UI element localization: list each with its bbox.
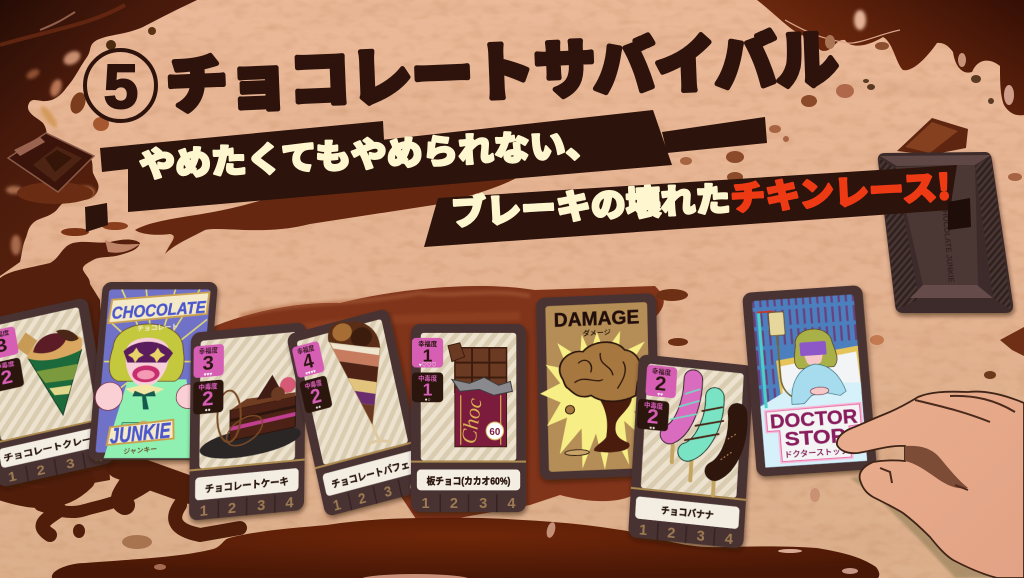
card: doctor stop [742, 285, 877, 477]
bar stats: ●○ [425, 398, 431, 403]
chocolate chunk: left [8, 133, 94, 192]
hand: shadow on table [850, 470, 1010, 578]
card: chocolate cake: 1 [200, 503, 208, 520]
chocolate bar illustration: 60 [489, 427, 501, 438]
JUNKIE logo: JUNKIE [110, 418, 172, 448]
card: chocolate parfait: 4 [408, 475, 418, 494]
bar stats: 1 [423, 345, 433, 366]
crepe illustration [14, 321, 94, 423]
chocolate splash: lower left [0, 465, 240, 535]
subtitle line 2: ブレーキの壊れたチキンレース! [450, 160, 952, 235]
cake stats: 幸福度 [199, 345, 218, 356]
parfait stats: ●● [315, 404, 322, 410]
doctor stop illustration [753, 305, 867, 468]
cake stats: 2 [202, 387, 214, 411]
card: chocolate junkie [88, 282, 218, 460]
banana stats [636, 364, 677, 433]
damage kana: ダメージ [583, 327, 611, 337]
cake stats: ●● [205, 408, 211, 414]
parfait stats [292, 341, 333, 414]
parfait stats: 4 [301, 350, 316, 375]
CHOCOLATE logo: チョコレート [137, 323, 178, 333]
DOCTOR STOP logo: STOP [784, 425, 847, 451]
CHOCOLATE logo [107, 292, 209, 333]
cake stats: ♥♥♥ [204, 372, 213, 378]
brain illustration [559, 341, 643, 456]
card: chocolate crepe: 4 [94, 450, 104, 466]
small chocolate piece on table: top right [897, 118, 1024, 356]
banana stats: 2 [654, 373, 667, 396]
title number badge: 5 [104, 53, 138, 122]
bar stats: ♥♡♡♡ [419, 363, 436, 369]
banana stats: ●● [649, 426, 655, 431]
chocolate splash: top right drips [757, 0, 1024, 115]
banana stats: ♥♥ [657, 393, 663, 398]
card: chocolate crepe [0, 297, 115, 488]
cake illustration [198, 372, 303, 465]
card: chocolate crepe: 1 [7, 469, 18, 486]
hand silhouette [837, 392, 1024, 578]
JUNKIE logo: ジャンキー [123, 445, 158, 456]
bar: upper right extension [662, 117, 767, 153]
cake name plate [195, 468, 299, 501]
card: chocolate parfait: 3 [382, 482, 393, 500]
card: chocolate cake: 2 [228, 500, 236, 517]
bar bevel left [879, 158, 919, 310]
parfait stats: 中毒度 [304, 378, 323, 391]
chocolate bar illustration [448, 343, 512, 447]
parfait stats: ♥♥♥♥ [305, 368, 317, 376]
bar: upper left stub [100, 121, 384, 172]
bar: small fragment [85, 203, 108, 232]
yellow burst [539, 330, 658, 472]
JUNKIE logo [106, 418, 175, 456]
card: chocolate parfait [286, 308, 428, 517]
parfait illustration [325, 313, 401, 453]
card: chocolate banana: 2 [667, 525, 676, 542]
chocolate bar illustration: Choc [457, 396, 487, 445]
card: chocolate cake: 3 [257, 498, 265, 514]
chocolate splash: top left [0, 0, 197, 500]
card: chocolate bar [411, 324, 526, 512]
bar stats: 幸福度 [418, 339, 438, 348]
DOCTOR STOP logo [764, 402, 866, 464]
card: chocolate cake: チョコレートケーキ [205, 476, 289, 496]
hand: pointing at card [837, 392, 1024, 578]
parfait stats: 幸福度 [296, 344, 315, 356]
card: chocolate bar: 板チョコ(カカオ60%) [427, 474, 510, 487]
card: chocolate cake: 4 [285, 495, 294, 512]
bar stats [412, 338, 443, 403]
bar name plate [417, 470, 520, 490]
card: chocolate banana [628, 354, 754, 549]
card: chocolate bar: 3 [479, 496, 487, 512]
junkie character [90, 324, 209, 458]
card: chocolate banana: 4 [724, 531, 734, 548]
banana name plate [635, 496, 740, 529]
card: chocolate bar: 4 [507, 496, 516, 512]
crepe name plate [0, 426, 106, 468]
bar: main upper [128, 110, 672, 212]
bar bevel top [880, 155, 991, 166]
crepe stats [0, 326, 24, 393]
DAMAGE heading: DAMAGE [554, 307, 639, 332]
title number badge [85, 50, 156, 122]
card: chocolate bar: 2 [450, 496, 458, 512]
chocolate pool: bottom [52, 518, 879, 578]
DOCTOR STOP logo: ドクターストップ [784, 445, 849, 460]
title text: チョコレートサバイバル [164, 9, 839, 127]
gap between finger and thumb [905, 446, 968, 488]
bar centre face [896, 165, 978, 285]
card: chocolate banana: チョコバナナ [661, 504, 714, 522]
banana illustration [666, 377, 740, 498]
junkie rays [97, 289, 210, 451]
bar bevel right [975, 156, 1011, 310]
bar embossed name: CHOCOLATE JUNKIE [940, 204, 956, 284]
banana stats: 中毒度 [644, 400, 664, 411]
chocolate smear under headline [135, 163, 526, 254]
card: damage [536, 293, 660, 480]
parfait name plate [322, 450, 418, 496]
cake stats: 3 [202, 351, 214, 375]
card: chocolate banana: 3 [696, 528, 705, 545]
card: chocolate parfait: 2 [357, 489, 368, 507]
subtitle line 1: やめたくてもやめられない、 [138, 117, 602, 187]
cake stats: 中毒度 [198, 381, 218, 392]
bar bevel bottom [910, 285, 993, 298]
bar: lower [424, 165, 957, 247]
bar stats: 中毒度 [418, 373, 438, 382]
big chocolate bar: right [878, 152, 1013, 313]
card: chocolate parfait: チョコレートパフェ [331, 459, 411, 490]
parfait stats: 2 [308, 384, 324, 409]
headline bars [85, 110, 971, 247]
card: chocolate crepe: 3 [65, 456, 76, 473]
card: chocolate bar: 1 [422, 496, 430, 512]
card: chocolate banana: 1 [639, 522, 648, 539]
bar: lower right stub [948, 198, 971, 230]
banana stats: 幸福度 [652, 366, 672, 377]
title [85, 9, 839, 127]
melted chocolate band behind cards [210, 286, 688, 525]
chocolate drops scattered on table [73, 75, 1022, 549]
card: chocolate parfait: 1 [332, 495, 342, 514]
knuckle lines [880, 396, 1015, 490]
bar outer body [878, 152, 1013, 313]
CHOCOLATE logo: CHOCOLATE [112, 297, 206, 323]
card: chocolate crepe: チョコレートクレープ [3, 432, 103, 464]
banana stats: 2 [646, 406, 659, 429]
card: chocolate crepe: 2 [36, 463, 46, 479]
card: chocolate cake [189, 322, 306, 521]
DOCTOR STOP logo: DOCTOR [769, 406, 858, 433]
bar stats: 1 [423, 379, 433, 399]
cake stats [193, 344, 224, 415]
